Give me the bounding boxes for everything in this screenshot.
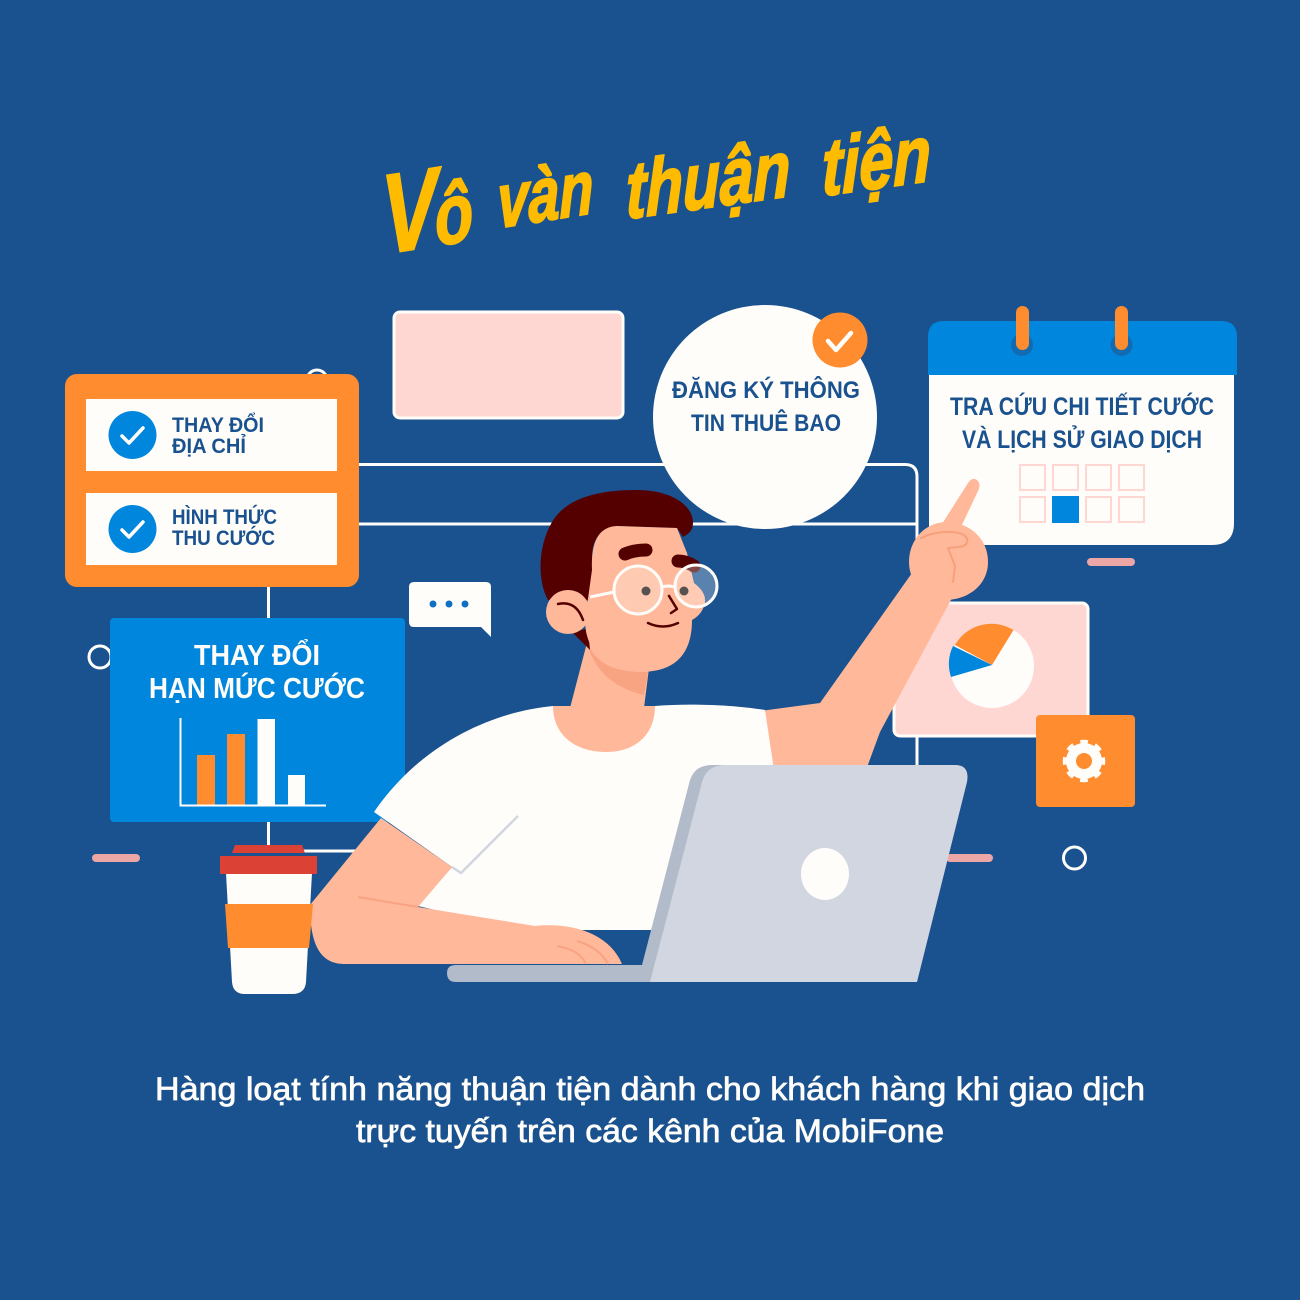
right arm and pointing hand xyxy=(760,479,988,770)
checklist row: payment method: THU CƯỚC xyxy=(172,525,275,550)
panel: calendar xyxy=(928,306,1237,545)
illustration: person xyxy=(310,479,988,964)
calendar date grid xyxy=(1020,465,1144,522)
icon: laptop xyxy=(447,765,968,982)
shirt fold xyxy=(452,816,518,873)
title xyxy=(379,108,931,279)
eyebrows xyxy=(625,550,694,566)
panel: blank pink card xyxy=(394,312,623,418)
calendar rings xyxy=(1011,306,1132,356)
icon: orange gear tile xyxy=(1036,715,1135,807)
left arm and hand xyxy=(310,818,622,964)
checklist row: payment method xyxy=(86,493,337,565)
hair behind ear xyxy=(573,628,590,650)
panel: orange checklist xyxy=(65,374,359,587)
glasses xyxy=(590,565,717,614)
panel: pie chart card xyxy=(894,603,1088,736)
checklist row: change address xyxy=(86,399,337,471)
neck xyxy=(570,635,650,708)
title: tiện xyxy=(822,108,931,214)
bar chart xyxy=(180,718,326,806)
caption: Hàng loạt tính năng thuận tiện dành cho khách hàng khi giao dịch xyxy=(155,1071,1145,1107)
checklist row: change address: THAY ĐỔI xyxy=(172,412,264,437)
icon: orange check badge xyxy=(812,312,868,368)
text: subscriber info second line: TIN THUÊ BAO xyxy=(691,409,841,437)
text: look up charges and transaction history: TRA CỨU CHI TIẾT CƯỚC xyxy=(950,391,1214,421)
collar xyxy=(553,706,655,752)
heading: change spending limit xyxy=(149,638,365,705)
heading: change spending limit: THAY ĐỔI xyxy=(194,638,320,672)
ear shape xyxy=(546,590,590,634)
checklist row: change address: ĐỊA CHỈ xyxy=(172,433,246,458)
text: look up charges and transaction history: VÀ LỊCH SỬ GIAO DỊCH xyxy=(962,424,1202,454)
hair xyxy=(541,490,693,600)
neck shadow xyxy=(588,645,648,695)
title: Vô xyxy=(379,139,476,279)
icon: speech bubble xyxy=(409,582,491,637)
title: thuận xyxy=(626,124,790,237)
caption xyxy=(155,1071,1145,1149)
icon: coffee cup xyxy=(220,845,317,994)
connector lines xyxy=(268,464,917,851)
eyes xyxy=(642,586,688,596)
face xyxy=(585,526,705,672)
checklist row: payment method: HÌNH THỨC xyxy=(172,504,277,529)
text: register subscriber info: ĐĂNG KÝ THÔNG xyxy=(672,376,860,404)
panel: spending limit chart xyxy=(110,618,405,822)
nose and mouth xyxy=(648,596,678,626)
t-shirt xyxy=(374,705,774,930)
caption: trực tuyến trên các kênh của MobiFone xyxy=(356,1113,944,1149)
title: vàn xyxy=(497,145,594,245)
panel: subscriber information circle xyxy=(653,305,877,529)
pie chart xyxy=(949,624,1034,708)
text: look up charges and transaction history xyxy=(950,391,1214,454)
decorative circles and dashes xyxy=(89,370,1135,869)
heading: change spending limit: HẠN MỨC CƯỚC xyxy=(149,671,365,705)
